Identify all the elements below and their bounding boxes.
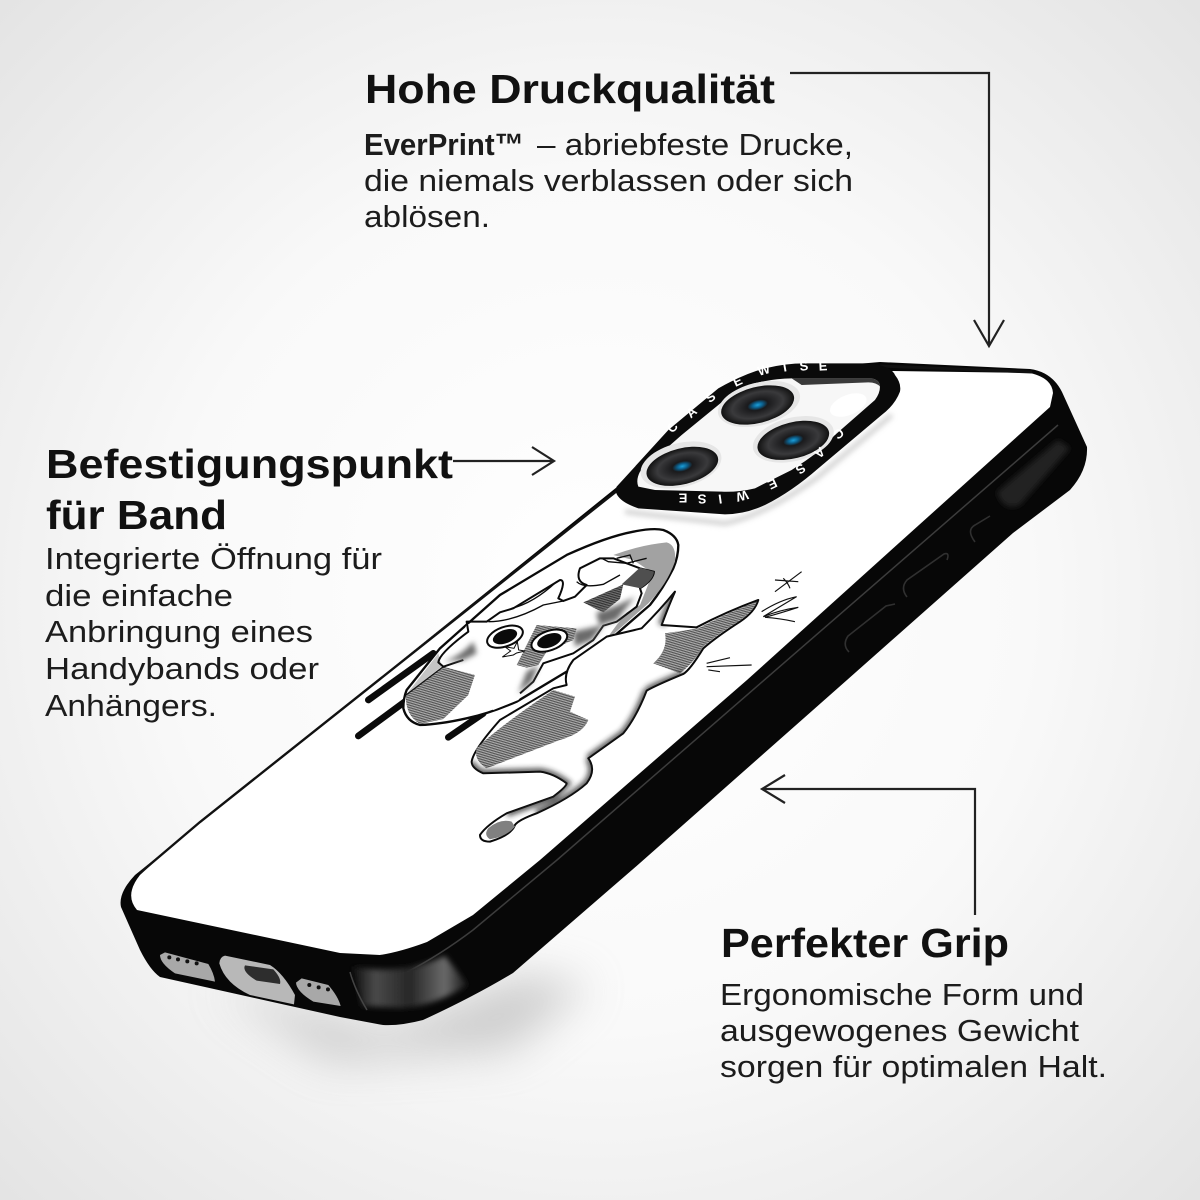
- camera bump: [616, 363, 900, 514]
- bubble left shading: [407, 653, 442, 693]
- body text: ablösen.: [364, 199, 490, 234]
- left eye: [484, 621, 526, 652]
- bubble lower patch: [406, 667, 475, 724]
- fur outline: [438, 558, 654, 693]
- motion bars: [358, 653, 483, 737]
- body text: sorgen für optimalen Halt.: [720, 1049, 1107, 1084]
- volume down: [845, 604, 895, 652]
- camera brand text: W: [734, 487, 750, 505]
- action button: [970, 516, 990, 542]
- lens top: [713, 373, 805, 435]
- corner highlight: [352, 956, 468, 1008]
- lens right: [748, 408, 839, 470]
- heading: [46, 441, 453, 538]
- camera window: [637, 378, 880, 492]
- camera brand text: E: [765, 475, 780, 493]
- corner seam: [350, 972, 367, 1010]
- camera brand text: S: [697, 491, 707, 507]
- body text: Ergonomische Form und: [720, 977, 1084, 1012]
- lens left: [636, 434, 726, 496]
- camera brand text: E: [818, 358, 828, 374]
- body text: EverPrint™: [364, 127, 524, 162]
- heading: Perfekter Grip: [721, 920, 1009, 966]
- bubble: [403, 529, 678, 725]
- camera brand text: C: [830, 425, 847, 443]
- cat body: [472, 572, 802, 842]
- camera module: [616, 363, 900, 523]
- body text: Handybands oder: [45, 651, 319, 686]
- fur soft shade: [443, 597, 635, 693]
- edge shading: [472, 592, 683, 813]
- top edge outline: [140, 490, 618, 873]
- arrow: print quality: [790, 73, 1004, 346]
- arrow: grip: [762, 775, 975, 915]
- body text: Integrierte Öffnung für: [45, 541, 382, 576]
- window top shade: [792, 378, 880, 387]
- camera brand text: A: [811, 444, 828, 462]
- arrow: strap point: [453, 447, 554, 475]
- phone case: [121, 362, 1087, 1025]
- bottom port: left speaker: [160, 952, 215, 982]
- callout: Befestigungspunkt: [45, 441, 453, 723]
- camera shadow: [625, 415, 892, 523]
- camera brand text: C: [664, 418, 681, 436]
- body text: Anhängers.: [45, 688, 217, 723]
- speed lines and star: [707, 572, 802, 672]
- body text: [45, 541, 382, 723]
- body text: – abriebfeste Drucke,: [537, 127, 853, 162]
- heading: Befestigungspunkt: [46, 441, 453, 487]
- fur shading dark: [622, 568, 654, 588]
- camera brand text: I: [717, 491, 723, 507]
- body text: die einfache: [45, 578, 233, 613]
- body text: [720, 977, 1107, 1084]
- body outline: [472, 592, 758, 842]
- camera brand text: S: [799, 358, 809, 374]
- side buttons: [845, 516, 990, 652]
- right eye: [528, 625, 570, 656]
- side vent: [997, 440, 1070, 507]
- side highlight line: [407, 425, 1058, 972]
- camera brand text: S: [792, 460, 808, 478]
- body text: Anbringung eines: [45, 614, 313, 649]
- callout: Perfekter Grip: [720, 920, 1107, 1084]
- case body: [121, 362, 1087, 1025]
- ear patch: [583, 584, 623, 612]
- nose star: [502, 642, 525, 657]
- bottom port: right speaker: [296, 978, 341, 1006]
- body text: die niemals verblassen oder sich: [364, 163, 853, 198]
- camera brand text: A: [683, 403, 700, 421]
- flash: [827, 388, 870, 422]
- body text: ausgewogenes Gewicht: [720, 1013, 1079, 1048]
- camera brand text: [664, 358, 847, 507]
- camera brand text: S: [702, 388, 719, 406]
- bubble and head: [403, 529, 678, 725]
- cat illustration: [358, 529, 802, 842]
- top right edge outline: [880, 366, 1032, 372]
- body text: [364, 127, 853, 234]
- volume up: [904, 554, 948, 597]
- body patch: [476, 690, 588, 768]
- heading: für Band: [46, 492, 227, 538]
- tail tip: [486, 821, 515, 839]
- cheek patch: [517, 625, 577, 668]
- camera brand text: E: [678, 491, 687, 506]
- callout: Hohe Druckqualität: [364, 66, 853, 234]
- phone shadow: [215, 975, 590, 1060]
- camera brand text: W: [756, 361, 772, 379]
- bottom port: charging: [219, 956, 295, 1004]
- bubble right shading: [605, 542, 675, 642]
- fur contour lines: [488, 555, 647, 622]
- heading: Hohe Druckqualität: [365, 66, 775, 112]
- bubble divider: [406, 667, 443, 695]
- camera brand text: I: [782, 359, 788, 375]
- face fill: [443, 558, 653, 710]
- camera brand text: E: [730, 372, 745, 390]
- arm patch: [653, 602, 757, 673]
- screen panel: [131, 371, 1053, 955]
